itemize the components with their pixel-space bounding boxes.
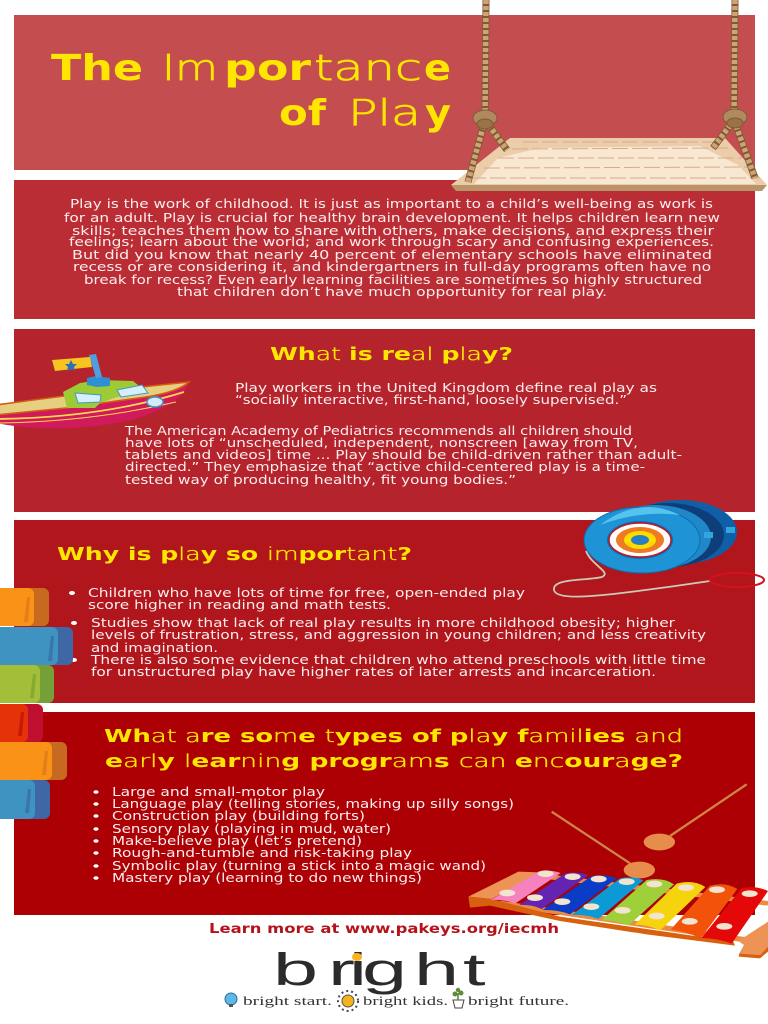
text block: introduction paragraph: recess or are considering it, and kindergartners in full-day programs often have no [73,260,711,274]
text block: play workers definition [235,381,657,407]
tagline with icons: bright start. [243,994,332,1008]
list: reasons play matters: levels of frustration, stress, and aggression in young children; and less creativity [91,628,706,642]
text block: introduction paragraph: that children don’t have much opportunity for real play. [177,285,607,299]
title: tanc [314,48,422,89]
heading: what is real play: Wh at is re al p la y? [270,345,513,365]
icon: wooden swing [451,0,767,191]
title [51,48,451,134]
text block: introduction paragraph: skills; teaches them how to share with others, make decisions, and express their [72,224,714,238]
icon: stacked blocks [0,588,73,819]
list: reasons play matters: score higher in reading and math tests. [88,598,391,612]
tagline with icons [225,988,569,1011]
text block: American Academy of Pediatrics: have lots of “unscheduled, independent, nonscreen [away from TV, [125,436,638,450]
text block: American Academy of Pediatrics: tablets and videos] time ... Play should be child-driven rather than adult- [125,448,682,462]
list: types of play: Sensory play (playing in mud, water) [112,822,391,836]
title: Pla [348,93,421,134]
list: reasons play matters: Studies show that lack of real play results in more childhood obesity; higher [91,616,675,630]
heading: why is play so important: Why is p la y so im por tant ? [57,545,412,565]
list: types of play: Large and small-motor play [112,785,325,799]
list: types of play: Language play (telling stories, making up silly songs) [112,797,514,811]
text block: American Academy of Pediatrics: directed.” They emphasize that “active child-centered play is a time- [125,460,645,474]
list: reasons play matters: There is also some evidence that children who attend preschools with little time [90,653,706,667]
text block: introduction paragraph: But did you know that nearly 40 percent of elementary schools have eliminated [72,248,712,262]
list: types of play: Symbolic play (turning a stick into a magic wand) [112,859,486,873]
text block: American Academy of Pediatrics [124,424,682,487]
list: types of play: Construction play (building forts) [112,809,365,823]
list: reasons play matters [69,586,706,679]
callout: learn more link: Learn more at www.pakeys.org/iecmh [209,922,559,937]
list: types of play: Mastery play (learning to do new things) [112,871,422,885]
list: types of play [93,785,514,885]
icon: potted plant [452,988,464,1008]
title: e [424,48,451,89]
text block: introduction paragraph: break for recess? Even early learning facilities are sometimes so highly structured [84,273,702,287]
heading: types of play [104,727,683,772]
logo: bright: bright [273,944,485,995]
panel: title banner [14,15,755,170]
panel: introduction [14,180,755,319]
panel: what is real play [14,329,755,512]
panel: why is play so important [14,520,755,703]
tagline with icons: bright future. [468,994,569,1008]
text block: American Academy of Pediatrics: The American Academy of Pediatrics recommends all children should [124,424,632,438]
icon: light bulb [225,993,237,1007]
icon: yo-yo [554,500,764,597]
title: por [224,48,311,89]
title: Im [162,48,218,89]
title: The [51,48,143,89]
title: of [279,93,326,134]
list: types of play: Rough-and-tumble and risk-taking play [112,846,412,860]
text block: introduction paragraph: Play is the work of childhood. It is just as important to a child’s well-being as work is [70,197,713,211]
list: reasons play matters: and imagination. [91,641,218,655]
text block: introduction paragraph [64,197,720,299]
icon: toy boat [0,354,189,428]
text block: introduction paragraph: for an adult. Play is crucial for healthy brain development. It helps children learn new [64,211,720,225]
list: reasons play matters: for unstructured play have higher rates of later arrests and incarceration. [91,665,656,679]
text block: introduction paragraph: feelings; learn about the world; and work through scary and confusing experiences. [69,235,714,249]
heading: types of play: e arl y lear nin g progr am s can e nc our a ge? [105,752,683,772]
icon: xylophone and mallets [468,784,768,958]
title: y [425,93,451,134]
text block: play workers definition: Play workers in the United Kingdom define real play as [235,381,657,395]
list: reasons play matters: Children who have lots of time for free, open-ended play [88,586,525,600]
list: types of play: Make-believe play (let’s pretend) [112,834,362,848]
panel: types of play [14,712,755,915]
text block: American Academy of Pediatrics: tested way of producing healthy, fit young bodies.” [125,473,516,487]
tagline with icons: bright kids. [363,994,448,1008]
icon: sun [338,991,358,1011]
text block: play workers definition: “socially interactive, first-hand, loosely supervised.” [235,393,627,407]
heading: types of play: Wh at a re so m e types of p la y f amil ies and [104,727,683,747]
